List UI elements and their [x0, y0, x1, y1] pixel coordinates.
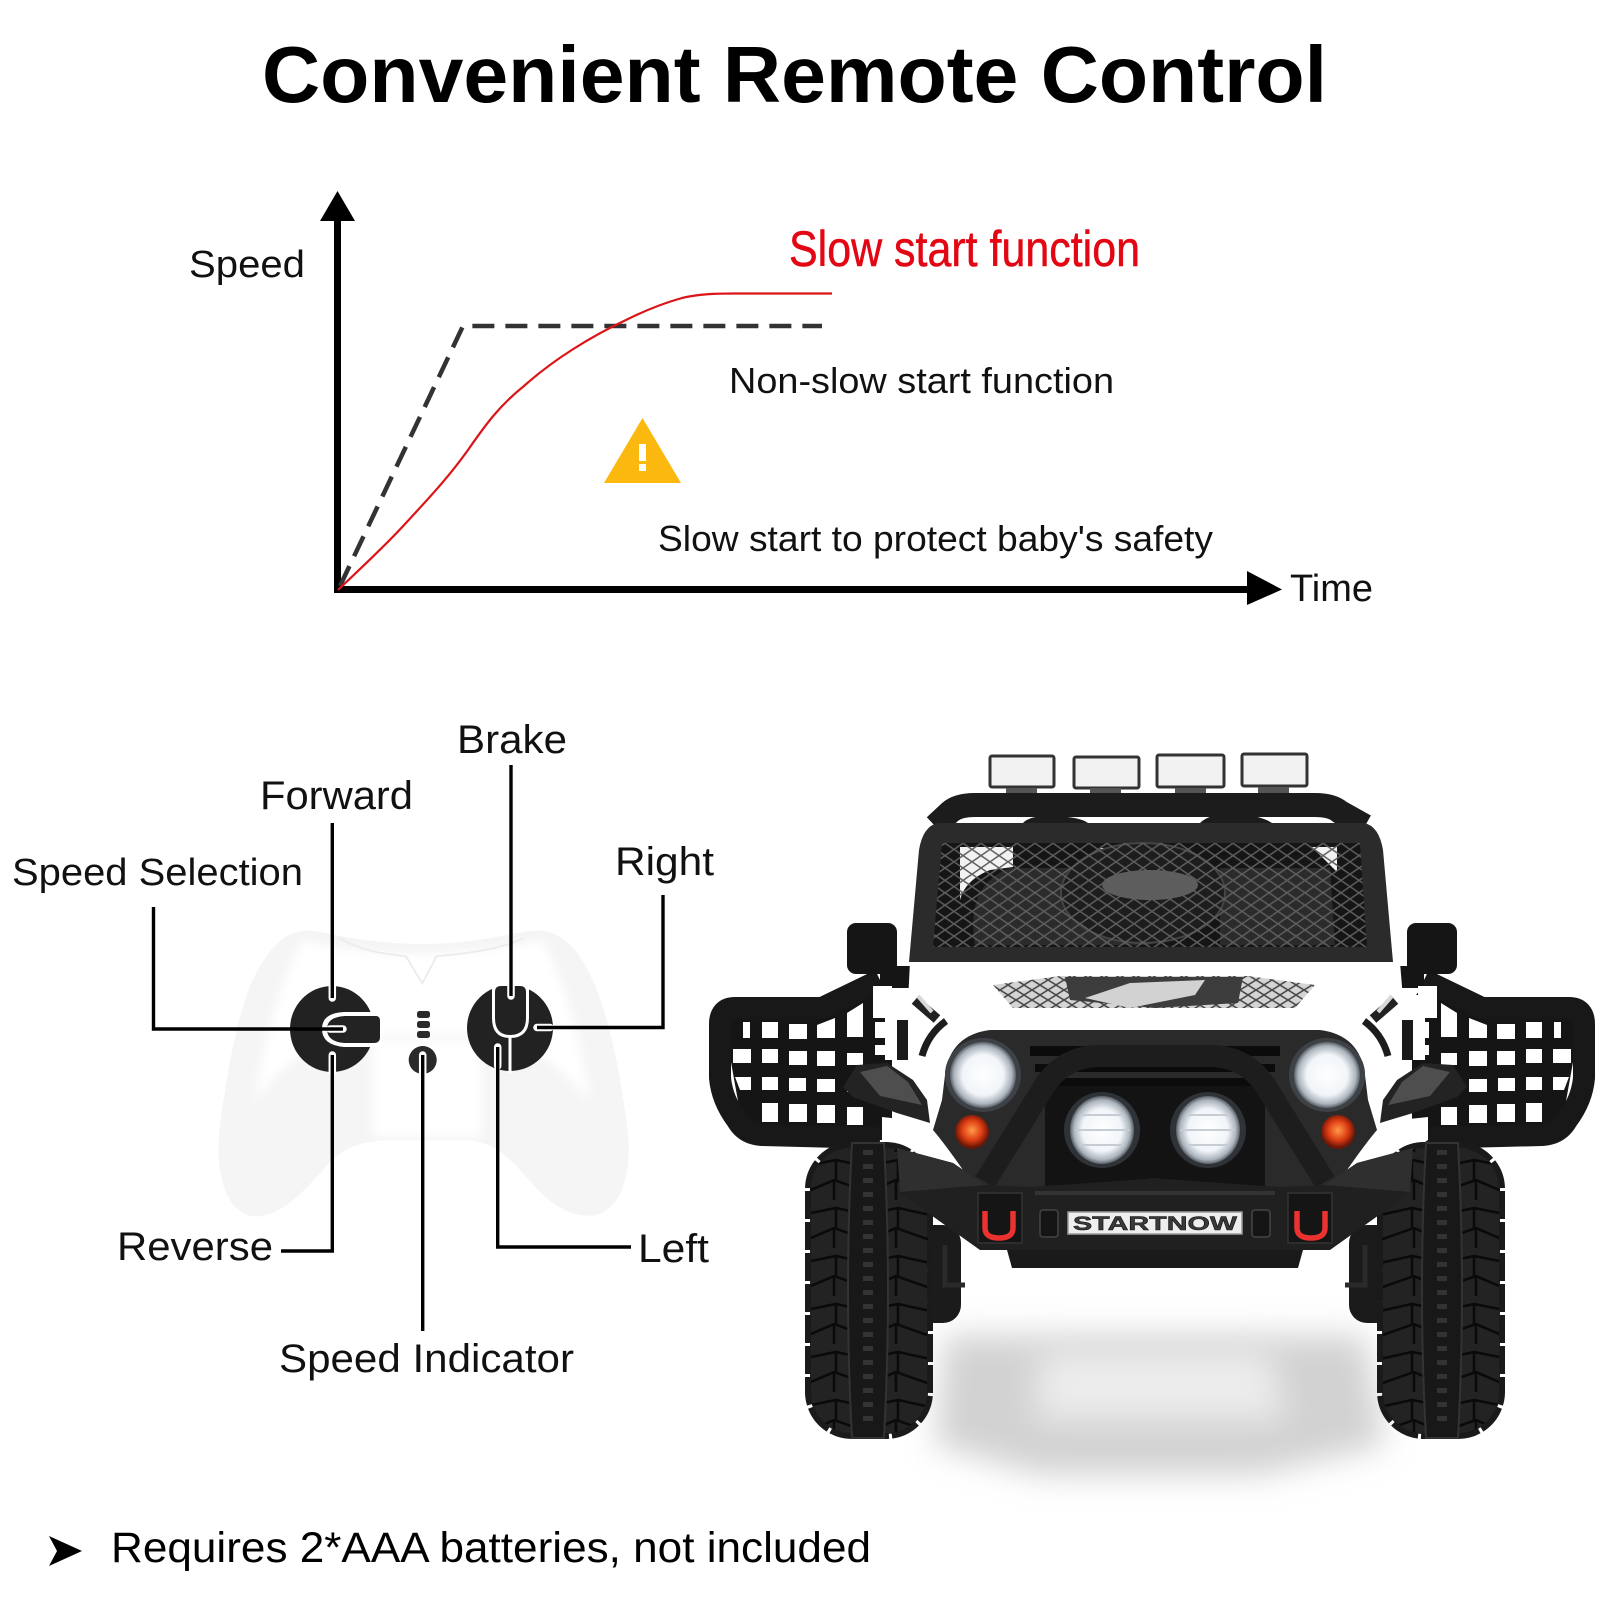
left side guard — [720, 923, 910, 1140]
x axis label: Time — [1290, 568, 1373, 610]
brand plate: STARTNOW — [1073, 1214, 1237, 1235]
left button cluster — [290, 986, 382, 1072]
y axis arrow — [320, 191, 355, 593]
bull bar and fog light left — [985, 1056, 1160, 1182]
windshield mesh — [933, 843, 1367, 947]
remote control diagram — [12, 718, 714, 1381]
title: Convenient Remote Control — [262, 30, 1327, 119]
remote control body — [218, 931, 629, 1217]
bull bar and fog light right — [1150, 1056, 1325, 1182]
note text: Requires 2*AAA batteries, not included — [111, 1524, 871, 1572]
white hood and body — [905, 962, 1408, 1130]
grille and front face — [933, 1030, 1377, 1195]
battery note — [49, 1524, 871, 1572]
bumper left — [897, 1148, 1160, 1268]
ground shadow — [935, 1335, 1385, 1475]
label: speed indicator: Speed Indicator — [279, 1337, 574, 1381]
roll bar — [935, 805, 1365, 826]
label: forward: Forward — [260, 774, 413, 818]
red curve: slow start — [338, 294, 832, 590]
white ride-on jeep photo — [720, 754, 1584, 1475]
label: non-slow start function: Non-slow start function — [729, 360, 1114, 401]
bumper right — [1150, 1148, 1413, 1268]
label: reverse: Reverse — [117, 1225, 273, 1269]
label: speed selection: Speed Selection — [12, 852, 303, 894]
label: brake: Brake — [457, 718, 567, 762]
hood vent — [993, 976, 1315, 1008]
chart: speed over time — [189, 191, 1373, 610]
front wheel right — [1380, 1143, 1502, 1438]
label: safety note: Slow start to protect baby's safety — [658, 518, 1213, 559]
icon: arrow bullet — [49, 1536, 82, 1566]
left fender and lamps — [843, 986, 1024, 1323]
dashed line: non-slow start — [340, 326, 822, 586]
leader lines — [154, 765, 663, 1331]
roof lights — [990, 754, 1307, 795]
right side guard — [1394, 923, 1584, 1140]
label: left: Left — [638, 1227, 709, 1271]
headlights and amber lamps — [945, 1038, 1365, 1149]
icon: warning triangle — [604, 418, 681, 483]
grille slats — [1030, 1046, 1280, 1186]
label: right: Right — [615, 840, 714, 884]
speed indicator lights — [417, 1011, 430, 1038]
y axis label: Speed — [189, 244, 305, 286]
x axis arrow — [334, 571, 1282, 605]
windshield frame — [909, 823, 1393, 962]
label: slow start function: Slow start function — [789, 221, 1140, 277]
right fender and lamps — [1286, 986, 1467, 1323]
brand plate — [1068, 1212, 1242, 1235]
speed button — [409, 1046, 437, 1074]
right button cluster — [467, 984, 553, 1073]
front wheel left — [808, 1143, 930, 1438]
